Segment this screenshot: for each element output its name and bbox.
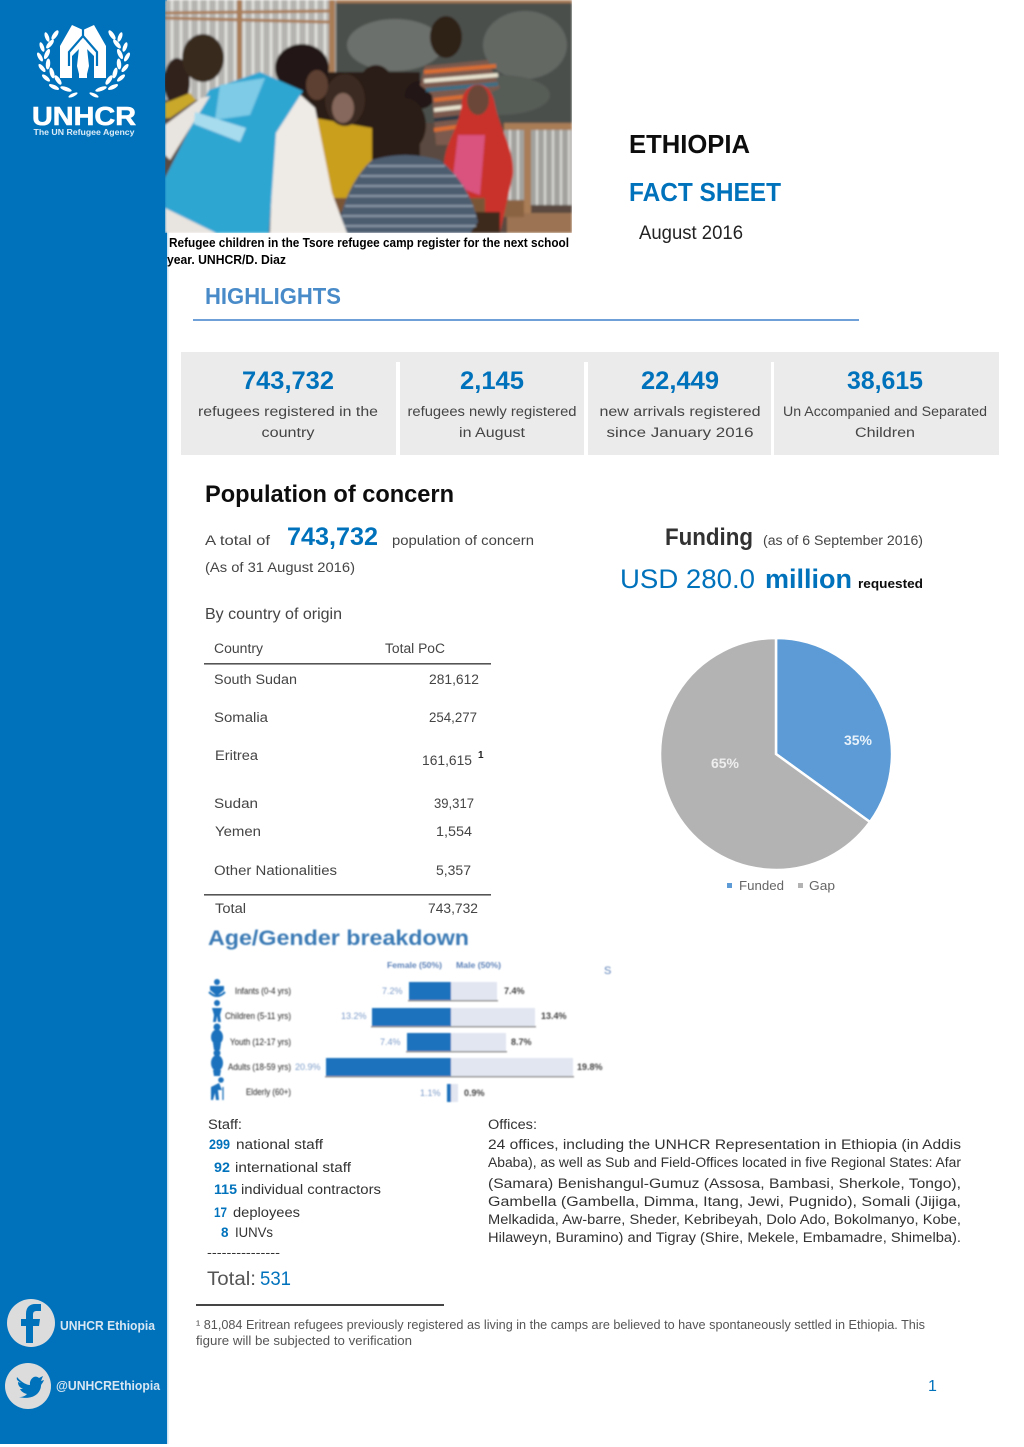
- table: country of origin: 39,317: [434, 796, 474, 811]
- footnote: ¹ 81,084 Eritrean refugees previously registered as living in the camps are believed to have spontaneously settled in Ethiopia. This: [196, 1318, 925, 1332]
- photo caption: year. UNHCR/D. Diaz: [167, 253, 286, 267]
- social: facebook: [7, 1299, 156, 1347]
- social: twitter: @UNHCREthiopia: [56, 1378, 161, 1393]
- footnote: [196, 1304, 925, 1348]
- funding header: USD 280.0: [620, 564, 755, 594]
- female values: 1.1%: [420, 1088, 441, 1098]
- male bars: [451, 982, 573, 1102]
- table: country of origin: South Sudan: [214, 672, 297, 687]
- stat: unaccompanied children: 38,615: [847, 367, 923, 395]
- table: country of origin: Total PoC: [385, 641, 445, 656]
- row labels: Infants (0-4 yrs): [235, 986, 291, 997]
- population total: A total of: [205, 532, 270, 548]
- panel: staff: 115: [214, 1182, 238, 1197]
- female bars: [326, 982, 451, 1102]
- photo: refugee children registering: [164, 0, 572, 233]
- panel: staff: IUNVs: [235, 1225, 273, 1240]
- chart: age gender pyramid: S: [604, 965, 611, 977]
- social: twitter: [5, 1363, 161, 1409]
- icon: laurel wreath: [36, 29, 131, 99]
- stat: new arrivals: [600, 367, 760, 440]
- panel: staff: international staff: [235, 1160, 351, 1175]
- stat: unaccompanied children: Un Accompanied and Separated: [783, 404, 987, 419]
- right wall: [504, 123, 572, 130]
- stat: new arrivals: new arrivals registered: [600, 404, 760, 419]
- stat: new registered: [408, 367, 576, 440]
- panel: offices: (Samara) Benishangul-Gumuz (Assosa, Bambasi, Sherkole, Tongo),: [488, 1176, 961, 1191]
- title: Fact sheet: FACT SHEET: [629, 177, 781, 207]
- table: country of origin: Total: [215, 901, 246, 916]
- table: country of origin: [204, 641, 491, 916]
- table: country of origin: Sudan: [214, 796, 258, 811]
- legend: [727, 878, 835, 893]
- male values: 7.4%: [504, 986, 525, 996]
- woman in red: [444, 84, 513, 232]
- panel: staff: 531: [260, 1269, 291, 1290]
- legend: Gap: [809, 878, 835, 893]
- panel: staff: 17: [214, 1205, 227, 1220]
- stat: refugees: 743,732: [242, 367, 334, 395]
- male values: 8.7%: [511, 1037, 532, 1047]
- sleeve: [270, 90, 347, 233]
- heading: highlights: HIGHLIGHTS: [205, 283, 341, 309]
- subheading: by country of origin: By country of origin: [205, 606, 342, 623]
- table: country of origin: Yemen: [215, 824, 261, 839]
- icons: age groups: [209, 979, 225, 1100]
- table: country of origin: 254,277: [429, 710, 477, 725]
- panel: offices: Ababa), as well as Sub and Field-Offices located in five Regional States: Afar: [488, 1155, 962, 1170]
- date: August 2016: [639, 222, 743, 244]
- chart: age gender pyramid: Female (50%): [387, 960, 442, 970]
- stat: unaccompanied children: Children: [855, 425, 915, 440]
- social: facebook: UNHCR Ethiopia: [60, 1318, 156, 1333]
- funding header: (as of 6 September 2016): [763, 533, 923, 548]
- dark group behind: [300, 72, 420, 162]
- wordmark: UNHCR: [32, 101, 136, 131]
- stat: new registered: in August: [459, 425, 525, 440]
- tagline: The UN Refugee Agency: [34, 128, 135, 137]
- population total: 743,732: [287, 523, 378, 551]
- table: country of origin: 281,612: [429, 672, 479, 687]
- funding header: million: [765, 564, 852, 594]
- row labels: Adults (18-59 yrs): [228, 1062, 291, 1073]
- panel: offices: Offices:: [488, 1117, 537, 1132]
- female values: [295, 986, 441, 1098]
- table: country of origin: 1,554: [436, 824, 473, 839]
- stat: refugees: [198, 367, 378, 440]
- panel: staff: [207, 1117, 381, 1290]
- funding header: requested: [858, 576, 923, 591]
- female values: 20.9%: [295, 1062, 321, 1072]
- panel: staff: Staff:: [208, 1117, 242, 1132]
- panel: staff: deployees: [233, 1205, 300, 1220]
- male values: 13.4%: [541, 1011, 567, 1021]
- panel: offices: [488, 1117, 962, 1245]
- background people: [164, 58, 190, 106]
- stat: new arrivals: since January 2016: [606, 425, 754, 440]
- photo caption: [167, 236, 569, 267]
- panel: offices: 24 offices, including the UNHCR Representation in Ethiopia (in Addis: [488, 1137, 961, 1152]
- stat: refugees: refugees registered in the: [198, 404, 378, 419]
- photo caption: Refugee children in the Tsore refugee camp register for the next school: [169, 236, 569, 250]
- title: Ethiopia: ETHIOPIA: [629, 129, 750, 159]
- blackboard: [336, 3, 572, 123]
- stat: new registered: 2,145: [460, 367, 524, 395]
- row labels: Youth (12-17 yrs): [230, 1037, 291, 1048]
- panel: staff: Total:: [207, 1269, 256, 1290]
- heading: age/gender breakdown: Age/Gender breakdown: [208, 927, 469, 950]
- logo: UNHCR: [32, 25, 136, 137]
- row labels: [225, 986, 291, 1098]
- panel: staff: national staff: [236, 1137, 323, 1152]
- child back: [418, 108, 427, 144]
- staff head: [275, 44, 329, 92]
- male values: [464, 986, 603, 1098]
- female values: 7.4%: [380, 1037, 401, 1047]
- pie chart: funding: 35%: [844, 732, 873, 748]
- chart: age gender pyramid: Male (50%): [456, 960, 501, 970]
- panel: staff: 299: [209, 1137, 230, 1152]
- stat: unaccompanied children: [783, 367, 987, 440]
- population total: [205, 523, 534, 575]
- female values: 7.2%: [382, 986, 403, 996]
- legend: Funded: [739, 878, 784, 893]
- panel: staff: 8: [221, 1225, 229, 1240]
- stat: new arrivals: 22,449: [641, 367, 719, 395]
- funding header: [620, 524, 923, 594]
- table: country of origin: 5,357: [436, 863, 471, 878]
- panel: staff: ---------------: [207, 1245, 280, 1260]
- chart: age gender pyramid: [209, 960, 611, 1102]
- male values: 19.8%: [577, 1062, 603, 1072]
- bar shadows: [325, 1000, 574, 1078]
- funding header: Funding: [665, 524, 753, 551]
- tables: [334, 197, 486, 214]
- standing person with stripes: [430, 16, 462, 58]
- panel: offices: Melkadida, Aw-barre, Sheder, Kebribeyah, Dolo Ado, Bokolmanyo, Kobe,: [488, 1212, 961, 1227]
- table: country of origin: Eritrea: [215, 748, 259, 763]
- panel: offices: Hilaweyn, Buramino) and Tigray (Shire, Mekele, Embamadre, Shimelba).: [488, 1230, 961, 1245]
- pie chart: funding: [660, 638, 892, 893]
- row labels: Elderly (60+): [246, 1087, 291, 1098]
- table: country of origin: Other Nationalities: [214, 863, 337, 878]
- table: country of origin: Country: [214, 641, 263, 656]
- yellow child: [313, 118, 372, 200]
- panel: staff: individual contractors: [241, 1182, 381, 1197]
- footnote: figure will be subjected to verification: [196, 1334, 412, 1348]
- stat: refugees: country: [262, 425, 315, 440]
- female values: 13.2%: [341, 1011, 367, 1021]
- corrugated wall: [165, 0, 336, 100]
- icon: sheltering hands: [60, 25, 106, 78]
- table: country of origin: 1: [478, 750, 484, 761]
- table: country of origin: 743,732: [428, 901, 478, 916]
- page number: 1: [928, 1378, 937, 1395]
- panel: offices: Gambella (Gambella, Dimma, Itang, Jewi, Pugnido), Somali (Jijiga,: [488, 1194, 961, 1209]
- panel: key figures: [181, 352, 999, 455]
- row labels: Children (5-11 yrs): [225, 1011, 291, 1022]
- table: country of origin: Somalia: [214, 710, 269, 725]
- staff vest: [165, 72, 303, 233]
- population total: (As of 31 August 2016): [205, 560, 355, 575]
- heading: population of concern: Population of concern: [205, 481, 454, 508]
- panel: staff: 92: [214, 1160, 230, 1175]
- title block: [629, 129, 781, 244]
- table: country of origin: 161,615: [422, 753, 472, 768]
- sidebar: [0, 0, 168, 1444]
- male values: 0.9%: [464, 1088, 485, 1098]
- pie chart: funding: 65%: [711, 755, 740, 771]
- population total: population of concern: [392, 532, 534, 548]
- stat: new registered: refugees newly registered: [408, 404, 576, 419]
